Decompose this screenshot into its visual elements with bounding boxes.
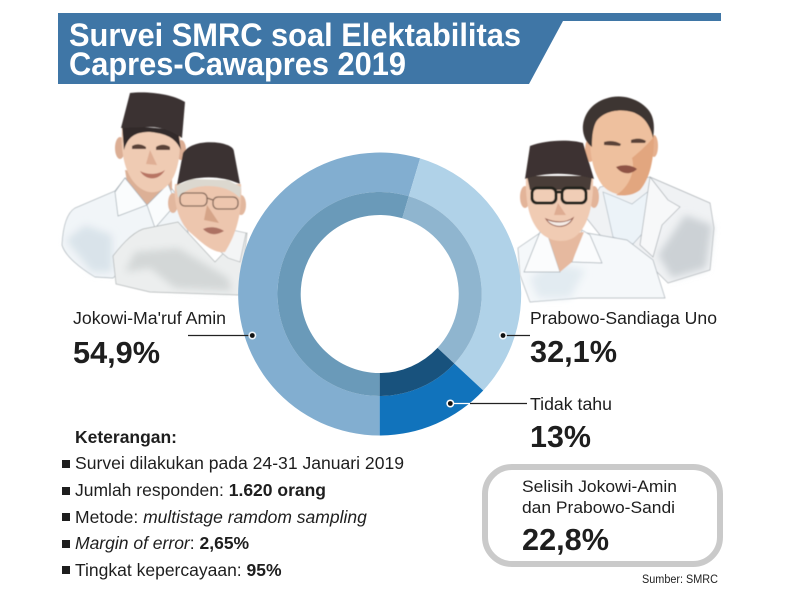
- title text: Survei SMRC soal Elektabilitas: [69, 17, 521, 53]
- outer segment: Jokowi-Ma'ruf Amin: [238, 153, 420, 436]
- Prabowo hair: [583, 96, 654, 147]
- Prabowo suit: [584, 177, 714, 283]
- leader line: Jokowi-Ma'ruf Amin: [188, 332, 256, 340]
- Ma'ruf shawl: [113, 222, 247, 295]
- Sandiaga face: [526, 176, 593, 241]
- label: Prabowo-Sandiaga Uno 32,1%: 32,1%: [530, 334, 617, 369]
- label: Jokowi-Ma'ruf Amin 54,9%: 54,9%: [73, 335, 160, 370]
- Sandiaga ears: [520, 186, 530, 208]
- leader line: Tidak tahu: [446, 400, 527, 408]
- Prabowo lapel: [640, 177, 680, 257]
- note: margin of error: Margin of error: 2,65%: [75, 533, 250, 553]
- title banner: [58, 13, 721, 84]
- outer segment: Prabowo-Sandiaga Uno: [409, 158, 521, 390]
- Sandiaga shirt: [518, 233, 665, 302]
- Sandiaga cap: [525, 141, 594, 179]
- callout: selisih: [485, 467, 720, 564]
- label: Prabowo-Sandiaga Uno 32,1%: Prabowo-Sandiaga Uno: [530, 308, 717, 328]
- illustration: Jokowi and Ma'ruf Amin: [62, 92, 247, 295]
- outer segment: Tidak tahu: [380, 364, 483, 436]
- label: Jokowi-Ma'ruf Amin 54,9%: Jokowi-Ma'ruf Amin: [73, 308, 226, 328]
- label: Tidak tahu 13%: Tidak tahu: [530, 394, 612, 414]
- note: respondents: Jumlah responden: 1.620 orang: [75, 480, 326, 500]
- source note: Sumber: SMRC: [642, 574, 718, 586]
- Sandiaga collar: [524, 230, 602, 272]
- Prabowo ears: [585, 138, 595, 162]
- Jokowi shirt: [62, 178, 190, 278]
- Jokowi ears: [115, 137, 125, 159]
- title text: [69, 17, 521, 82]
- illustration: Prabowo and Sandiaga Uno: [518, 96, 714, 302]
- notes heading: Keterangan:: [75, 427, 177, 447]
- Ma'ruf glasses: [180, 193, 238, 209]
- Jokowi neck: [125, 170, 172, 206]
- inner segment: Tidak tahu: [380, 348, 454, 396]
- Prabowo shirt: [603, 190, 650, 244]
- title text: Capres-Cawapres 2019: [69, 46, 406, 82]
- Jokowi face: [122, 128, 180, 192]
- label: Prabowo-Sandiaga Uno 32,1%: [530, 308, 717, 369]
- label: Tidak tahu 13%: [530, 394, 612, 454]
- label: Jokowi-Ma'ruf Amin 54,9%: [73, 308, 226, 370]
- Prabowo face: [590, 109, 653, 195]
- callout: selisih: dan Prabowo-Sandi: [522, 498, 675, 517]
- Jokowi cap: [121, 92, 185, 138]
- callout: selisih: Selisih Jokowi-Amin: [522, 477, 677, 496]
- donut chart: [238, 153, 521, 436]
- Ma'ruf cap: [177, 142, 240, 185]
- leader line: Prabowo-Sandiaga Uno: [499, 332, 530, 340]
- Ma'ruf ears: [168, 193, 178, 213]
- inner segment: Jokowi-Ma'ruf Amin: [277, 192, 409, 396]
- note: method: Metode: multistage ramdom sampling: [75, 507, 367, 527]
- callout: selisih: 22,8%: [522, 522, 609, 557]
- notes: keterangan: [62, 427, 404, 580]
- note: survey date: Survei dilakukan pada 24-31 Januari 2019: [75, 453, 404, 473]
- Sandiaga glasses: [532, 188, 586, 203]
- inner segment: Prabowo-Sandiaga Uno: [402, 196, 482, 364]
- note: confidence level: Tingkat kepercayaan: 95%: [75, 560, 282, 580]
- Ma'ruf face: [175, 184, 241, 252]
- Jokowi collar: [115, 178, 176, 228]
- label: Tidak tahu 13%: 13%: [530, 419, 591, 454]
